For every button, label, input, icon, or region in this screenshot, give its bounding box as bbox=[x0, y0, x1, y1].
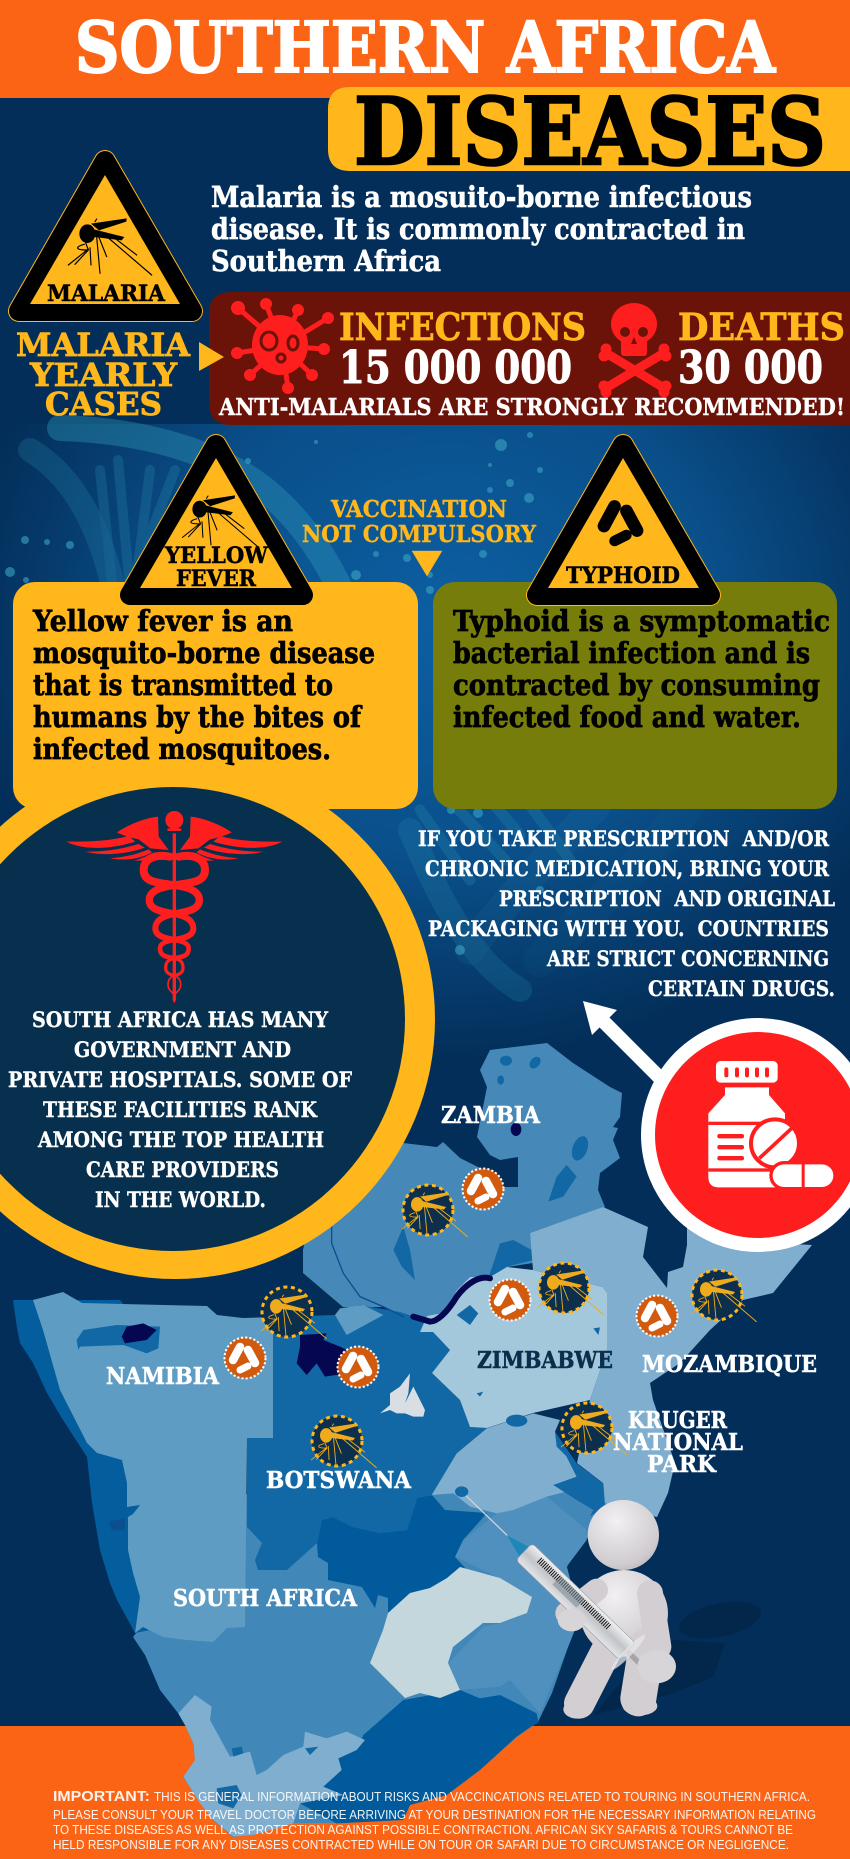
malaria yearly cases label bbox=[16, 326, 191, 423]
map country labels bbox=[106, 1102, 817, 1612]
malaria warning sign bbox=[19, 161, 192, 311]
title: Southern Africa: SOUTHERN AFRICA bbox=[75, 6, 776, 89]
Western Cape bbox=[178, 1695, 365, 1837]
important disclaimer: IMPORTANT: bbox=[53, 1788, 150, 1805]
Namibia salt pan bbox=[77, 1323, 160, 1531]
South Africa base bbox=[133, 1490, 620, 1837]
map country labels: PARK bbox=[647, 1451, 717, 1478]
arrow to statistics bbox=[199, 342, 224, 371]
Namibia coastal strip bbox=[13, 1300, 200, 1633]
icon: caduceus bbox=[66, 811, 282, 1003]
label: infections: INFECTIONS bbox=[339, 305, 586, 349]
header band bbox=[0, 0, 850, 98]
panel: yellow fever: Yellow fever is an bbox=[32, 604, 293, 638]
Namibia bbox=[33, 1292, 273, 1642]
Zambezi river bbox=[332, 1223, 490, 1322]
Mozambique bbox=[530, 1207, 812, 1517]
yellow fever warning sign: FEVER bbox=[176, 566, 257, 592]
shadow bbox=[593, 1595, 764, 1715]
vaccination note: VACCINATION bbox=[330, 496, 507, 523]
malaria yearly cases label: MALARIA bbox=[16, 326, 191, 364]
Caprivi strip bbox=[297, 1305, 425, 1417]
malaria description: Southern Africa bbox=[211, 244, 441, 278]
panel: yellow fever: mosquito-borne disease bbox=[33, 636, 375, 670]
Limpopo and Mpumalanga regions bbox=[432, 1305, 605, 1517]
important disclaimer: THIS IS GENERAL INFORMATION ABOUT RISKS AND VACCINCATIONS RELATED TO TOURING IN SOUTHERN AFRICA. bbox=[154, 1790, 810, 1804]
panel: typhoid: infected food and water. bbox=[453, 700, 801, 734]
salt pans bbox=[380, 1373, 425, 1417]
panel: yellow fever: that is transmitted to bbox=[33, 668, 333, 702]
vaccination note: NOT COMPULSORY bbox=[302, 521, 537, 548]
map country labels: ZAMBIA bbox=[441, 1102, 541, 1129]
malaria yearly cases label: CASES bbox=[45, 385, 162, 423]
Zambia bbox=[303, 1043, 622, 1322]
icon: medicine bottle badge bbox=[641, 1018, 850, 1252]
panel: yellow fever bbox=[13, 582, 418, 809]
malaria warning sign: MALARIA bbox=[47, 281, 166, 307]
vaccination note bbox=[302, 496, 537, 576]
map country labels: KRUGER bbox=[628, 1407, 728, 1434]
hospitals text: PRIVATE HOSPITALS. SOME OF bbox=[8, 1067, 352, 1092]
panel: typhoid: bacterial infection and is bbox=[453, 636, 810, 670]
map country labels: MOZAMBIQUE bbox=[642, 1351, 817, 1378]
syringe bbox=[449, 1478, 661, 1685]
malaria yearly cases label: YEARLY bbox=[29, 356, 178, 394]
hospitals text: CARE PROVIDERS bbox=[86, 1157, 279, 1182]
eastern provinces bbox=[448, 1497, 587, 1713]
panel: yellow fever: infected mosquitoes. bbox=[33, 732, 331, 766]
Zambia lakes bbox=[393, 1055, 591, 1283]
panel: typhoid bbox=[433, 582, 837, 809]
map country labels: SOUTH AFRICA bbox=[173, 1585, 358, 1612]
hospitals text: SOUTH AFRICA HAS MANY bbox=[32, 1007, 329, 1032]
map of Southern Africa bbox=[13, 1043, 812, 1837]
panel: malaria statistics bbox=[209, 292, 850, 425]
icon: virus bbox=[231, 298, 334, 394]
arrow to medication text bbox=[583, 1001, 668, 1086]
malaria description: Malaria is a mosuito-borne infectious bbox=[211, 180, 752, 214]
hospitals text: AMONG THE TOP HEALTH bbox=[37, 1127, 324, 1152]
Zimbabwe bbox=[420, 1267, 607, 1428]
hospitals text: THESE FACILITIES RANK bbox=[43, 1097, 318, 1122]
yellow fever warning sign bbox=[130, 445, 303, 595]
number: deaths: 30 000 bbox=[678, 341, 823, 394]
hand bbox=[558, 1609, 586, 1631]
hospitals text: IN THE WORLD. bbox=[95, 1187, 266, 1212]
Okavango delta bbox=[297, 1333, 353, 1377]
typhoid warning sign: TYPHOID bbox=[566, 563, 680, 589]
typhoid warning sign bbox=[537, 445, 710, 595]
label: deaths: DEATHS bbox=[678, 305, 845, 349]
figure body bbox=[563, 1570, 668, 1719]
important disclaimer bbox=[53, 1788, 816, 1852]
icon: skull and crossbones bbox=[598, 303, 672, 398]
panel: hospitals circle bbox=[0, 759, 435, 1279]
dark northern South Africa bbox=[317, 1495, 487, 1613]
hospitals text bbox=[8, 1007, 352, 1212]
Free State pale region bbox=[370, 1567, 532, 1698]
number: infections: 15 000 000 bbox=[339, 341, 572, 394]
map icons: typhoid bacteria markers bbox=[224, 1168, 678, 1388]
map country labels: NAMIBIA bbox=[106, 1363, 220, 1390]
figure holding syringe bbox=[449, 1478, 764, 1719]
important disclaimer: HELD RESPONSIBLE FOR ANY DISEASES CONTRACTED WHILE ON TOUR OR SAFARI DUE TO CIRCUMSTANCE OR NEGLIGENCE. bbox=[53, 1838, 789, 1852]
yellow fever warning sign: YELLOW bbox=[164, 543, 268, 569]
footer band bbox=[0, 1726, 850, 1859]
malaria description bbox=[211, 180, 752, 278]
important disclaimer: TO THESE DISEASES AS WELL AS PROTECTION AGAINST POSSIBLE CONTRACTION. AFRICAN SKY SAFARIS & TOURS CANNOT BE bbox=[53, 1823, 793, 1837]
figure head bbox=[588, 1500, 659, 1570]
dark southern South Africa bbox=[178, 1690, 538, 1837]
Botswana bbox=[247, 1305, 487, 1570]
malaria description: disease. It is commonly contracted in bbox=[211, 212, 745, 246]
hospitals text: GOVERNMENT AND bbox=[74, 1037, 291, 1062]
panel: yellow fever: humans by the bites of bbox=[33, 700, 363, 734]
map country labels: NATIONAL bbox=[613, 1429, 743, 1456]
map country labels: BOTSWANA bbox=[266, 1467, 412, 1494]
map icons: malaria mosquito markers bbox=[261, 1185, 756, 1468]
important disclaimer: PLEASE CONSULT YOUR TRAVEL DOCTOR BEFORE ARRIVING AT YOUR DESTINATION FOR THE NECESSARY INFORMATION RELATING bbox=[53, 1808, 816, 1822]
map country labels: ZIMBABWE bbox=[477, 1347, 613, 1374]
medication advice text bbox=[418, 826, 835, 1001]
DNA background image bbox=[0, 424, 850, 1064]
